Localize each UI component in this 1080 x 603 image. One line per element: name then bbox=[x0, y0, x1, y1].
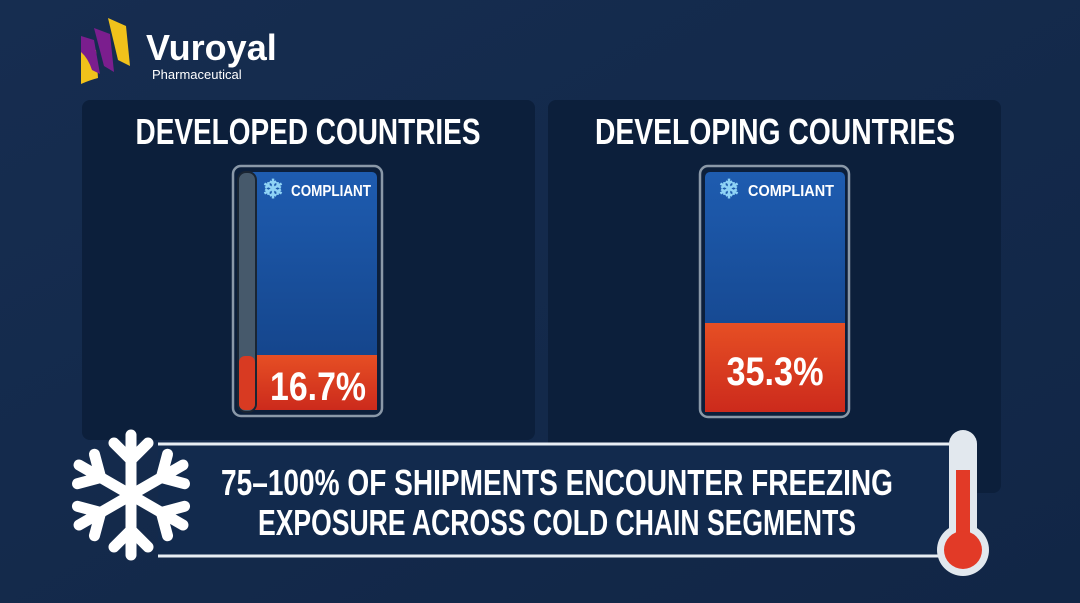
callout banner: 75–100% OF SHIPMENTS ENCOUNTER FREEZING bbox=[221, 462, 893, 503]
gauge: developed 16.7%: 16.7% bbox=[270, 365, 366, 409]
icon: snowflake bbox=[71, 435, 191, 555]
callout banner bbox=[158, 444, 950, 556]
logo: Vuroyal bbox=[146, 27, 277, 68]
gauge: developing 35.3%: 35.3% bbox=[726, 350, 824, 394]
heading: developed: DEVELOPED COUNTRIES bbox=[136, 111, 480, 152]
panel: developed countries bbox=[82, 100, 535, 440]
gauge: developing 35.3% bbox=[700, 166, 849, 417]
gauge: developing 35.3%: ❄ bbox=[718, 174, 740, 204]
gauge: developed 16.7%: COMPLIANT bbox=[291, 183, 371, 200]
logo bbox=[81, 18, 277, 84]
icon: thermometer bbox=[937, 430, 989, 576]
callout banner: EXPOSURE ACROSS COLD CHAIN SEGMENTS bbox=[258, 502, 856, 543]
gauge: developed 16.7% bbox=[233, 166, 382, 416]
gauge: developing 35.3%: COMPLIANT bbox=[748, 183, 834, 200]
gauge: developed 16.7%: ❄ bbox=[262, 174, 284, 204]
heading: developing: DEVELOPING COUNTRIES bbox=[595, 111, 955, 152]
panel: developing countries bbox=[548, 100, 1001, 493]
logo: Pharmaceutical bbox=[152, 67, 242, 82]
